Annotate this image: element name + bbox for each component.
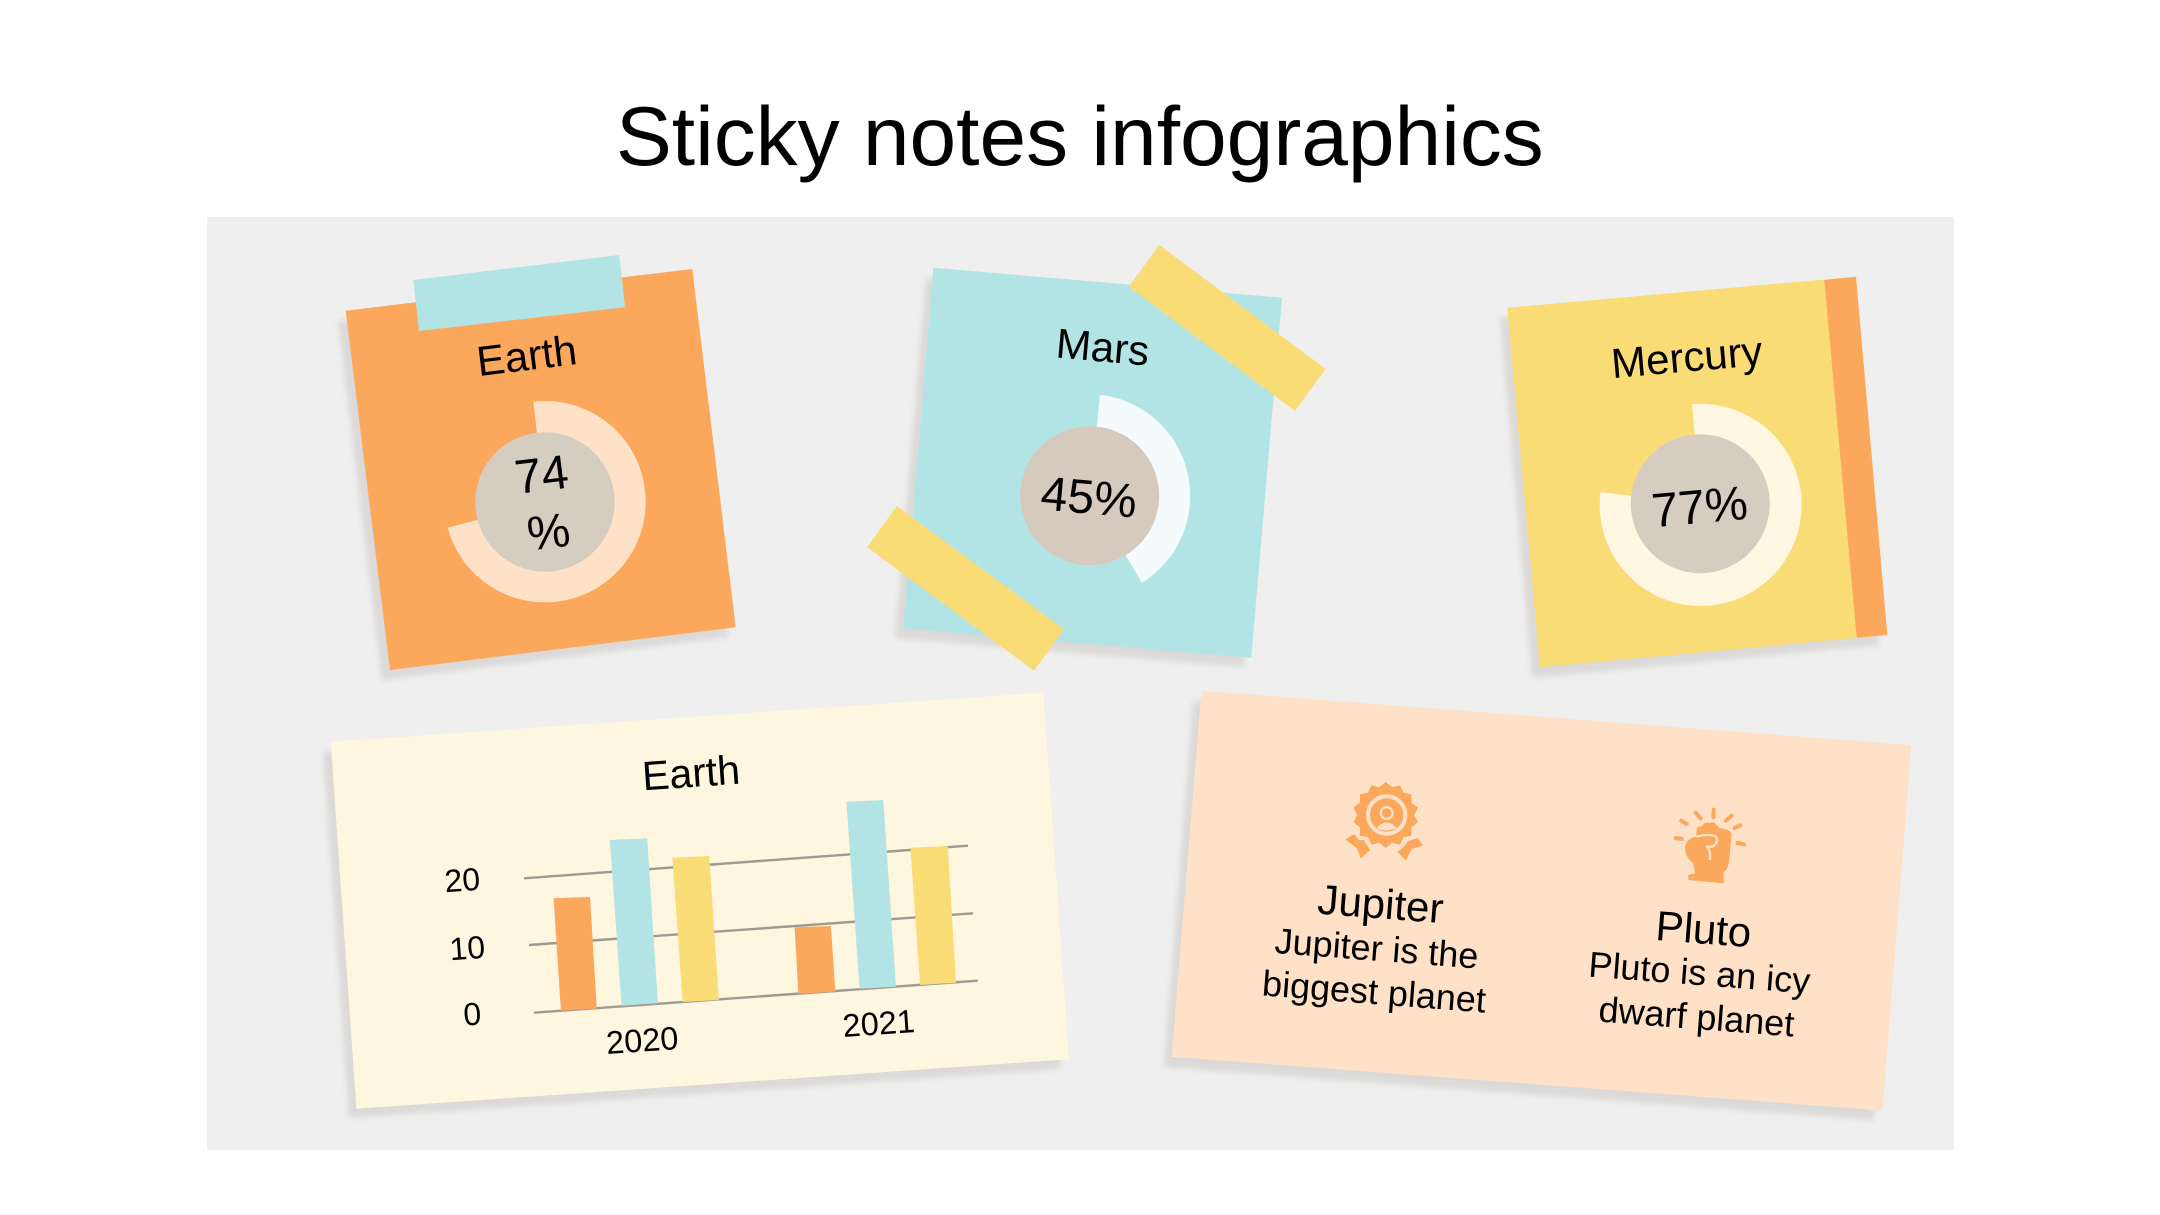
x axis labels: 2021: [841, 1003, 916, 1044]
donut chart: 74%: %: [524, 504, 573, 562]
x axis labels: [605, 1003, 916, 1061]
text block: Pluto: dwarf planet: [1597, 989, 1796, 1044]
donut chart: 74%: [448, 401, 646, 602]
bar chart: [443, 800, 978, 1061]
panel: Earth sticky note: [338, 255, 736, 680]
donut chart: 45%: [1020, 395, 1190, 583]
heading: Earth: Earth: [474, 326, 579, 385]
text block: Jupiter: biggest planet: [1261, 962, 1487, 1021]
panel: Mars sticky note: [867, 245, 1326, 671]
text block: Pluto: Pluto is an icy: [1587, 944, 1812, 1001]
donut chart: 45%: 45%: [1039, 467, 1139, 529]
panel: Jupiter and Pluto note: [1164, 691, 1912, 1120]
panel: Mercury sticky note: [1500, 277, 1887, 678]
strip: orange edge: [1824, 277, 1887, 638]
text block: Jupiter: [1261, 876, 1487, 1021]
bars 2020: [554, 838, 719, 1011]
icon: raised fist: [1676, 810, 1744, 883]
tape: yellow bottom: [867, 506, 1064, 671]
background panel: [207, 217, 1954, 1150]
bars 2021: [795, 800, 956, 994]
x axis labels: 2020: [605, 1020, 680, 1061]
text block: Jupiter: Jupiter: [1316, 876, 1445, 932]
text block: Jupiter: Jupiter is the: [1273, 920, 1480, 977]
panel: Earth bar chart note: [323, 693, 1069, 1118]
heading: Mercury: Mercury: [1609, 327, 1764, 387]
heading: Earth: Earth: [641, 747, 742, 799]
y axis labels: 10: [448, 929, 486, 967]
y axis labels: [443, 861, 486, 1033]
tape: teal: [413, 255, 625, 331]
y axis labels: 20: [443, 861, 481, 899]
title: Sticky notes infographics: [616, 89, 1544, 183]
y axis labels: 0: [462, 995, 482, 1033]
text block: Pluto: [1587, 902, 1812, 1044]
text block: Pluto: Pluto: [1654, 902, 1753, 956]
tape: yellow top: [1129, 245, 1326, 411]
donut chart: 74%: 74: [512, 446, 571, 505]
heading: Mars: Mars: [1054, 320, 1151, 375]
donut chart: 77%: 77%: [1649, 477, 1750, 538]
donut chart: 77%: [1600, 404, 1802, 606]
icon: medal: [1345, 782, 1423, 860]
